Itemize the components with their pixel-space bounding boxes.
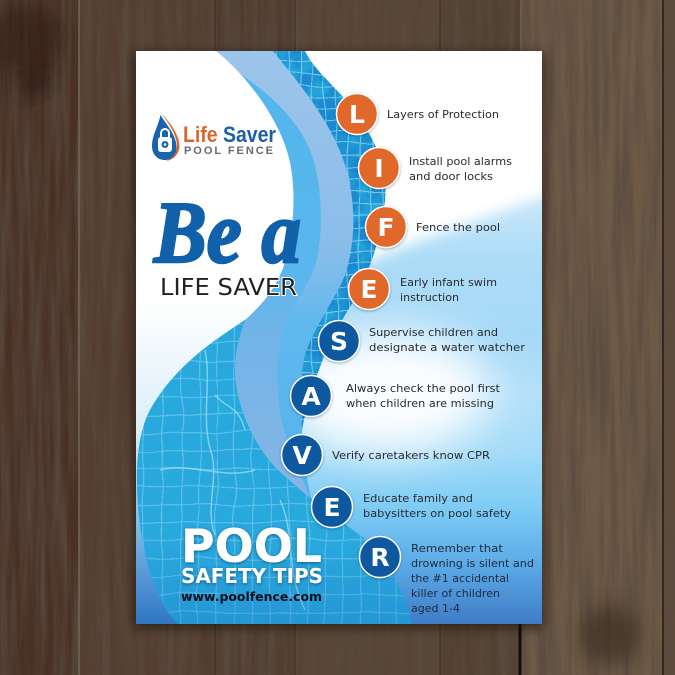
ribbon: inner bright band [235,74,321,498]
badge L: L [349,100,365,129]
badge V: V [292,441,312,470]
badge E2: E [323,493,341,522]
ribbon: outer periwinkle band [216,51,354,498]
heading: Be a: Be a [153,185,301,282]
pool safety tips title [181,519,323,588]
heading: Life Saver: LIFE SAVER [160,275,297,301]
white left area [200,51,294,352]
step A [290,376,501,416]
step I [358,148,512,188]
text I: Install pool alarms [409,155,512,168]
text V: Verify caretakers know CPR [332,449,490,462]
logo subtitle: POOL FENCE [184,145,273,157]
text R: Remember that [411,542,504,555]
text R: killer of children [411,587,500,600]
text L: Layers of Protection [387,108,499,121]
text R: aged 1-4 [411,602,460,615]
text I: and door locks [409,170,493,183]
step L [336,94,499,134]
step S [318,320,525,362]
mosaic strip [273,51,386,430]
text E2: Educate family and [363,492,473,505]
badge S [318,320,360,362]
badge E: E [360,275,378,304]
text S: Supervise children and [369,326,498,339]
POOL: POOL [181,519,322,573]
badge A: A [301,382,321,411]
poster shadow [134,53,544,628]
badge I [358,148,400,188]
poster panel [130,40,560,630]
step E [348,268,497,310]
text A: Always check the pool first [346,382,501,395]
step R [360,536,534,615]
text A: when children are missing [346,397,494,410]
badge L [336,94,378,134]
text R: drowning is silent and [411,557,534,570]
text R: the #1 accidental [411,572,509,585]
badge E2 [312,486,352,528]
badge V [282,434,322,476]
step F [366,206,500,248]
badge R: R [370,543,390,572]
logo wordmark: Life Saver [183,122,276,147]
white glow right of ribbon [280,330,490,454]
badge A [290,376,332,416]
badge E [348,268,390,310]
text E: Early infant swim [400,276,497,289]
text S: designate a water watcher [369,341,525,354]
badge S: S [330,327,348,356]
text E2: babysitters on pool safety [363,507,511,520]
white top-right area [321,72,542,268]
website: www.poolfence.com [181,589,322,604]
text E: instruction [400,291,459,304]
badge R [360,536,400,578]
step E2 [312,486,511,528]
badge I: I [374,154,384,183]
logo [152,113,276,161]
pool water [130,315,420,630]
badge F: F [377,213,395,242]
SAFETY TIPS: SAFETY TIPS [181,564,323,588]
sky gradient background [302,51,542,624]
left background [136,352,199,624]
text F: Fence the pool [416,221,500,234]
icon: water drop with lock [152,113,180,161]
step V [282,434,490,476]
